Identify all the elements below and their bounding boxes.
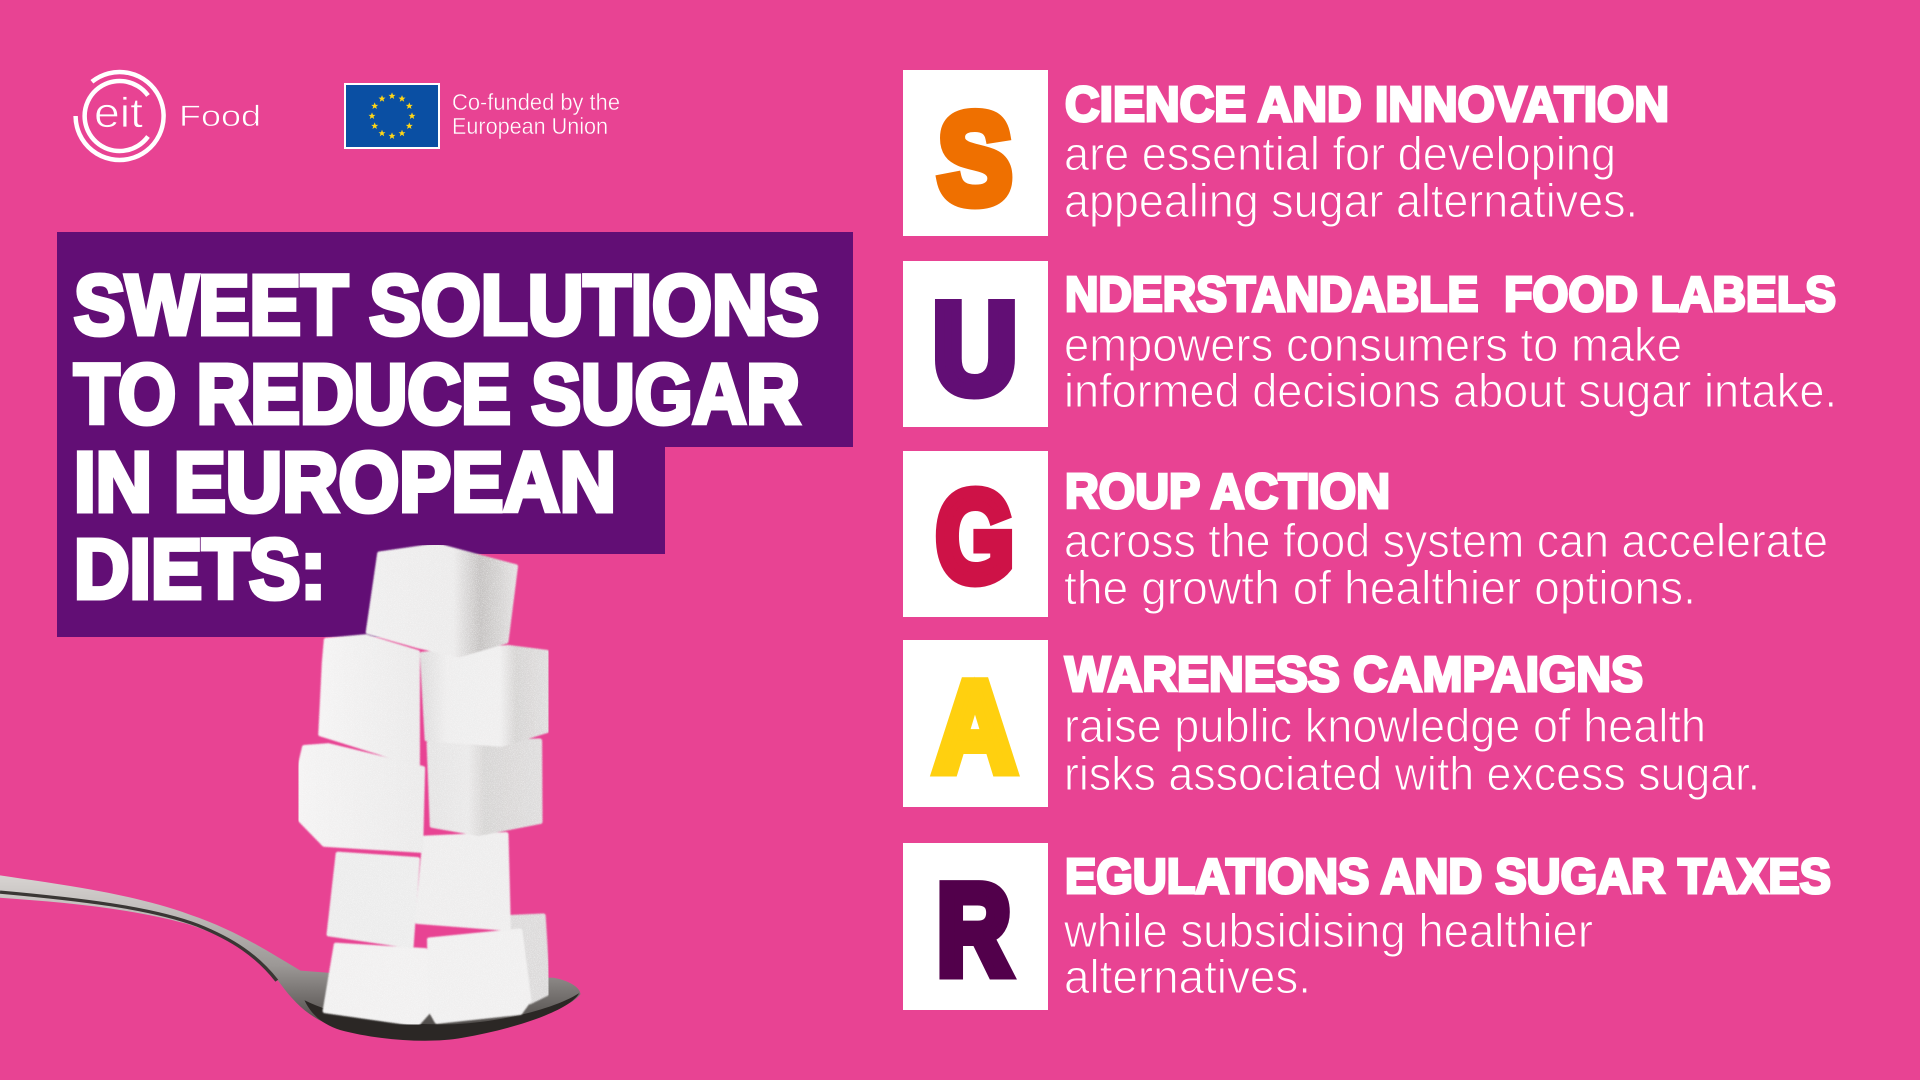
row S: science and innovation: [903, 70, 1669, 236]
body S: appealing sugar alternatives.: [1064, 174, 1638, 227]
letter tile U: [903, 261, 1048, 427]
body R: while subsidising healthier: [1063, 904, 1593, 957]
letter tile R: [903, 843, 1048, 1010]
cube: head: [368, 545, 516, 655]
letter tile S: S: [938, 88, 1012, 231]
body U: informed decisions about sugar intake.: [1064, 364, 1837, 417]
body A: raise public knowledge of health: [1064, 699, 1706, 752]
cube: left torso: [321, 636, 418, 765]
row R: regulations and sugar taxes: [903, 843, 1831, 1010]
title text: IN EUROPEAN: [74, 435, 616, 529]
heading A: WARENESS CAMPAIGNS: [1065, 648, 1643, 702]
body S: are essential for developing: [1064, 127, 1616, 180]
letter tile A: [903, 640, 1048, 807]
panel background: [57, 232, 853, 637]
letter tile S: [903, 70, 1048, 236]
cube: right foot back: [510, 916, 548, 1002]
row A: awareness campaigns: [903, 640, 1760, 807]
body A: [1064, 699, 1760, 800]
icon: EU flag: [344, 83, 440, 149]
co-funded text: European Union: [452, 113, 608, 139]
illustration: sugar cubes on spoon: [0, 545, 580, 1041]
co-funded text: [452, 89, 620, 139]
cube: right upper torso: [422, 647, 547, 745]
title text: SWEET SOLUTIONS: [74, 258, 819, 352]
title panel: [57, 232, 853, 637]
cube: left hip: [299, 745, 423, 851]
logo: EIT Food: eit: [94, 89, 143, 136]
heading R: EGULATIONS AND SUGAR TAXES: [1065, 850, 1831, 904]
heading U: NDERSTANDABLE FOOD LABELS: [1065, 268, 1836, 322]
cube: left foot: [325, 945, 429, 1024]
body U: [1064, 318, 1837, 417]
title text: [74, 258, 819, 616]
body G: [1064, 514, 1828, 614]
body U: empowers consumers to make: [1064, 318, 1682, 371]
letter tile G: [903, 451, 1048, 617]
body R: [1063, 904, 1593, 1003]
letter tile G: G: [936, 466, 1014, 609]
row U: understandable food labels: [903, 261, 1837, 427]
cube: right leg: [417, 834, 508, 929]
heading G: ROUP ACTION: [1065, 465, 1390, 519]
letter tile U: U: [933, 278, 1017, 421]
title text: DIETS:: [74, 522, 326, 616]
title text: TO REDUCE SUGAR: [74, 347, 800, 441]
letter tile A: A: [934, 656, 1016, 799]
cube: right foot front: [429, 931, 529, 1022]
row G: group action: [903, 451, 1828, 617]
body G: the growth of healthier options.: [1064, 561, 1696, 614]
body S: [1064, 127, 1638, 227]
logo: EIT Food: Food: [179, 100, 261, 133]
letter tile R: R: [937, 859, 1011, 1002]
cube: right lower torso: [429, 741, 540, 834]
spoon: [0, 875, 580, 1041]
body R: alternatives.: [1064, 950, 1311, 1003]
sugar cubes: [299, 545, 548, 1024]
co-funded text: Co-funded by the: [452, 89, 620, 115]
heading S: CIENCE AND INNOVATION: [1065, 78, 1669, 132]
cube: left leg: [329, 854, 418, 946]
body G: across the food system can accelerate: [1064, 514, 1828, 567]
body A: risks associated with excess sugar.: [1064, 747, 1760, 800]
logo: EU flag and co-funded statement: [344, 83, 620, 149]
logo: EIT Food: [76, 72, 261, 160]
